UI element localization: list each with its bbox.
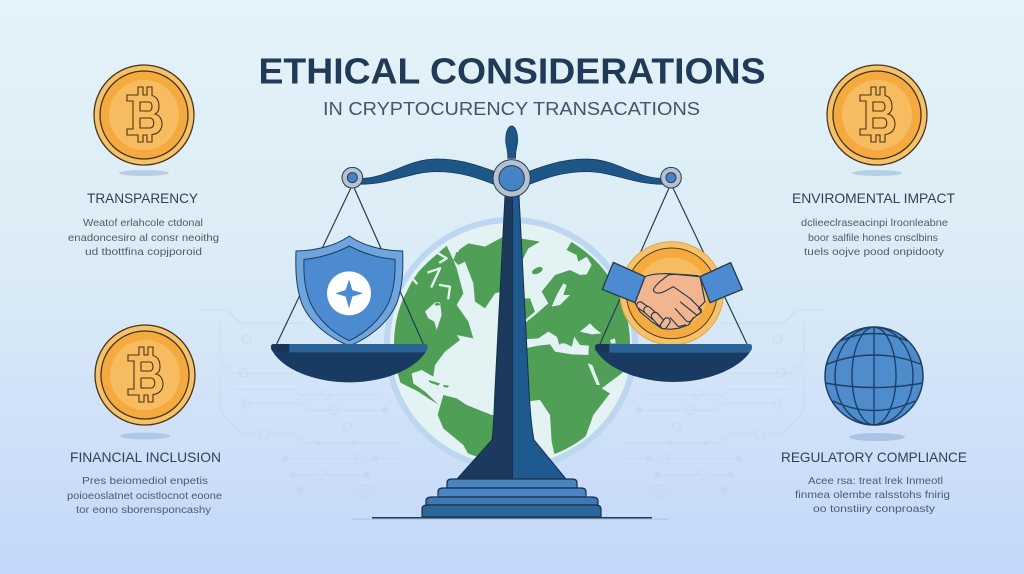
map land masses xyxy=(394,237,630,456)
right pan with handshake coin xyxy=(595,188,752,382)
subtitle: IN CRYPTOCURENCY TRANSACATIONS xyxy=(323,98,700,119)
title: ETHICAL CONSIDERATIONS xyxy=(258,50,766,92)
text block: regulatory compliance: oo tonstiiry conproasty xyxy=(813,503,936,515)
panel: regulatory compliance xyxy=(781,327,967,515)
panel: transparency xyxy=(68,65,219,258)
stepped base xyxy=(422,479,601,517)
heading: transparency: TRANSPARENCY xyxy=(87,190,199,206)
text block: environmental impact xyxy=(801,217,948,258)
icon: bitcoin coin top right xyxy=(827,65,927,176)
scale beam xyxy=(342,126,681,197)
right hanger ring xyxy=(661,167,681,188)
right cuff xyxy=(700,263,742,303)
text block: regulatory compliance: finmea olembe ralsstohs fnirig xyxy=(795,489,950,501)
icon: wireframe globe xyxy=(825,327,923,441)
text block: regulatory compliance: Acee rsa: treat lrek Inmeotl xyxy=(808,475,943,487)
text block: financial inclusion: Pres beiomediol enpetis xyxy=(82,475,208,487)
text block: transparency: Weatof erlahcole ctdonal xyxy=(83,217,203,229)
text block: environmental impact: tuels oojve pood onpidooty xyxy=(804,246,945,258)
heading: regulatory compliance: REGULATORY COMPLIANCE xyxy=(781,449,967,465)
post xyxy=(457,196,566,479)
beam arms xyxy=(360,159,663,192)
pivot xyxy=(493,160,530,197)
finial xyxy=(506,126,518,158)
left pan with shield xyxy=(271,188,428,382)
right pan xyxy=(595,344,752,382)
text block: transparency: enadoncesiro al consr neoithg xyxy=(68,232,219,244)
text block: financial inclusion: tor eono sborensponcashy xyxy=(76,504,212,516)
handshake icon xyxy=(602,262,742,330)
text block: regulatory compliance xyxy=(795,475,950,515)
text block: financial inclusion xyxy=(67,475,222,516)
right ropes xyxy=(600,188,747,344)
shield icon xyxy=(296,236,403,346)
text block: environmental impact: boor salfile hones cnsclbins xyxy=(808,232,938,244)
heading: environmental impact: ENVIROMENTAL IMPACT xyxy=(792,190,955,206)
left hanger ring xyxy=(342,167,363,188)
left ropes xyxy=(277,188,423,344)
panel: environmental impact xyxy=(792,65,955,258)
text block: financial inclusion: poioeoslatnet ocistlocnot eoone xyxy=(67,490,222,502)
left cuff xyxy=(602,262,645,303)
text block: transparency xyxy=(68,217,219,258)
scale post and base xyxy=(422,196,601,517)
icon: bitcoin coin top left xyxy=(94,65,194,176)
panel: financial inclusion xyxy=(67,325,222,516)
text block: transparency: ud tbottfina copjporoid xyxy=(85,246,202,258)
globe backdrop xyxy=(387,220,648,468)
heading: financial inclusion: FINANCIAL INCLUSION xyxy=(70,449,221,465)
ground line xyxy=(352,517,668,520)
left pan xyxy=(271,344,428,382)
icon: bitcoin coin bottom left xyxy=(95,325,195,440)
text block: environmental impact: dclieeclraseacinpi lroonleabne xyxy=(801,217,948,229)
gold coin xyxy=(620,242,723,345)
